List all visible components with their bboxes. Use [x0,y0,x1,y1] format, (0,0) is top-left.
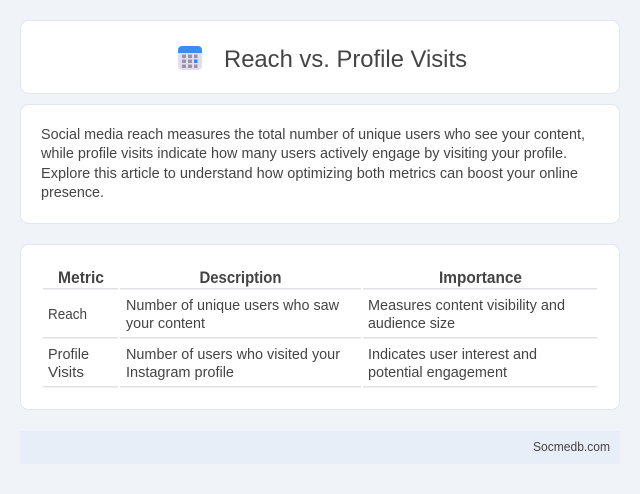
table header: Description [200,269,282,287]
table row: Reach: your content [126,315,206,332]
intro paragraph: presence. [41,184,104,201]
title: Reach vs. Profile Visits [224,46,467,73]
panel: title card [20,20,620,94]
footer [20,431,620,464]
table header: Metric [58,269,104,287]
intro paragraph: Social media reach measures the total number of unique users who see your content, [41,126,585,143]
panel: intro text [20,104,620,224]
table row: Profile Visits: Visits [48,364,84,381]
intro paragraph: while profile visits indicate how many users actively engage by visiting your profile. [40,145,567,162]
panel: comparison table [20,244,620,410]
table row: Profile Visits: Number of users who visited your [126,346,340,363]
table row: Profile Visits: Profile [48,346,89,363]
table row: Reach: Measures content visibility and [368,297,565,314]
table header [58,269,522,287]
table row: Profile Visits: Instagram profile [126,364,234,381]
table row: Reach: audience size [368,315,455,332]
table row: Reach: Reach [48,306,87,323]
table row: Profile Visits [48,346,537,381]
footer: Socmedb.com [533,440,610,454]
icon: calendar [178,46,202,70]
intro paragraph [40,126,585,201]
table row: Profile Visits: potential engagement [368,364,508,381]
table header: Importance [439,269,522,287]
intro paragraph: Explore this article to understand how optimizing both metrics can boost your online [41,165,578,182]
table row: Profile Visits: Indicates user interest and [368,346,537,363]
table row: Reach: Number of unique users who saw [126,297,339,314]
table row: Reach [48,297,565,332]
